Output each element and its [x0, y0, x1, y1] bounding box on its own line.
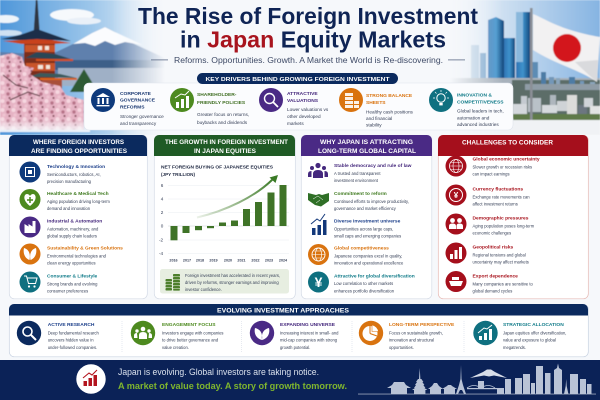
item: stable democracy: A trusted and transparent — [334, 171, 381, 176]
bar chart: 2 — [161, 210, 164, 215]
approach: engagement focus: ENGAGEMENT FOCUS — [162, 322, 216, 328]
driver: innovation: INNOVATION & — [457, 92, 492, 98]
driver: corporate governance: GOVERNANCE — [120, 98, 156, 104]
heading: why Japan: LONG-TERM GLOBAL CAPITAL — [318, 149, 416, 155]
item: global uncertainty — [446, 156, 540, 177]
item: currency: affect investment returns — [472, 202, 518, 207]
panel: growth in foreign investment — [154, 135, 295, 299]
item: global uncertainty: can impact earnings — [472, 172, 510, 177]
bar chart: 2018 — [196, 258, 204, 262]
heading: growth — [154, 135, 295, 156]
item: commitment to reform: Continued efforts to improve productivity, — [334, 199, 409, 204]
driver: corporate governance — [91, 88, 164, 126]
driver: strong balance sheets: STRONG BALANCE — [366, 93, 413, 99]
callout: chart note: investor confidence. — [185, 287, 222, 292]
heading: opportunities: ARE FINDING OPPORTUNITIES — [31, 149, 127, 155]
item: global competitiveness: innovation and operational excellence — [334, 261, 404, 266]
heading: key drivers: KEY DRIVERS BEHIND GROWING FOREIGN INVESTMENT — [206, 77, 390, 83]
item: consumer: Consumer & Lifestyle — [47, 274, 98, 280]
item: sustainability: Sustainability & Green Solutions — [47, 246, 123, 252]
item: diverse universe: Diverse investment universe — [334, 218, 401, 224]
driver: corporate governance: Stronger governance — [120, 114, 164, 119]
bar chart: 2024 — [279, 258, 288, 262]
callout: chart note: Foreign investment has accelerated in recent years, — [185, 273, 280, 278]
item: demographics — [446, 214, 535, 236]
item: export dependence — [446, 271, 533, 294]
driver: corporate governance: CORPORATE — [120, 91, 152, 97]
approach: strategic allocation — [473, 321, 566, 350]
photo: pagoda, Mount Fuji and cherry blossoms — [0, 0, 165, 135]
approach: expanding universe: mid-cap companies with strong — [280, 338, 338, 343]
item: demographics: economic challenges — [472, 231, 511, 236]
heading: approaches — [9, 304, 588, 316]
bar chart: 2022 — [251, 258, 260, 262]
item: geopolitical: Geopolitical risks — [472, 245, 514, 251]
item: industrial: global supply chain leaders — [47, 234, 97, 238]
bar chart: 2023 — [265, 258, 273, 262]
item: export dependence: global demand cycles — [472, 289, 512, 294]
photo: Tokyo skyscrapers and Japanese flag — [455, 0, 600, 121]
icon: rising chart badge — [76, 364, 106, 394]
item: global competitiveness: Global competitiveness — [334, 246, 389, 252]
item: healthcare: Aging population driving long-term — [47, 199, 110, 204]
heading: why Japan: WHY JAPAN IS ATTRACTING — [320, 140, 413, 146]
footer message: Japan is evolving. Global investors are taking notice. — [118, 367, 319, 377]
heading: growth: IN JAPAN EQUITIES — [194, 149, 256, 155]
driver: shareholder policies: Greater focus on returns, — [197, 112, 249, 117]
arrow: growth trend — [197, 175, 278, 218]
item: demographics: Demographic pressures — [472, 216, 529, 222]
item: healthcare — [20, 189, 110, 211]
icon: coin stacks — [166, 274, 180, 291]
driver: strong balance sheets — [339, 88, 414, 128]
approach: long-term perspective: innovation and structural — [389, 338, 434, 343]
heading: opportunities: WHERE FOREIGN INVESTORS — [33, 140, 124, 146]
approach: expanding universe: growth potential. — [280, 345, 310, 350]
chart title: NET FOREIGN BUYING OF JAPANESE EQUITIES — [161, 164, 274, 170]
chart title: (JPY TRILLION) — [161, 172, 195, 178]
driver: corporate governance: REFORMS — [120, 104, 145, 110]
driver: attractive valuations — [259, 88, 329, 126]
title — [138, 3, 478, 52]
approach: active research: Deep fundamental research — [48, 330, 99, 336]
approach: long-term perspective: Focus on sustainable growth, — [389, 330, 443, 336]
bar chart: 2019 — [209, 258, 218, 262]
item: global diversification: Low correlation to other markets — [334, 281, 393, 286]
heading: challenges: CHALLENGES TO CONSIDER — [462, 140, 554, 146]
title: in Japan Equity Markets — [180, 26, 446, 52]
item: currency: Exchange rate movements can — [472, 195, 530, 200]
driver: corporate governance: and transparency — [120, 121, 157, 126]
approach: long-term perspective: LONG-TERM PERSPECTIVE — [389, 322, 455, 328]
driver: strong balance sheets: SHEETS — [366, 100, 386, 106]
item: industrial: Automation, machinery, and — [47, 226, 99, 232]
approach: strategic allocation: Japan equities offer diversification, — [503, 330, 566, 336]
driver: innovation: Global leaders in tech, — [457, 108, 504, 114]
driver: innovation: advanced industries — [457, 122, 499, 127]
item: global competitiveness: Japanese companies excel in quality, — [334, 254, 402, 259]
driver: shareholder policies: SHAREHOLDER- — [197, 92, 237, 98]
chart title — [161, 164, 274, 178]
item: diverse universe: small caps and emerging companies — [334, 234, 401, 238]
item: industrial — [20, 216, 102, 238]
approach: engagement focus: Investors engage with companies — [162, 330, 223, 336]
item: global uncertainty: Slower growth or recession risks — [472, 165, 532, 170]
driver: strong balance sheets: and financial — [366, 116, 392, 121]
item: geopolitical — [446, 242, 529, 265]
driver: attractive valuations: ATTRACTIVE — [287, 91, 318, 97]
approach: strategic allocation: value and exposure to global — [503, 338, 556, 343]
footer message: A market of value today. A story of growth tomorrow. — [118, 381, 347, 391]
approach: engagement focus — [131, 321, 223, 350]
title: The Rise of Foreign Investment — [138, 3, 478, 29]
heading: approaches: EVOLVING INVESTMENT APPROACHES — [217, 308, 349, 314]
item: global competitiveness — [308, 244, 404, 266]
heading: challenges — [438, 135, 588, 156]
item: export dependence: Many companies are sensitive to — [472, 282, 533, 287]
bar chart: 2021 — [237, 258, 246, 262]
item: currency: Currency fluctuations — [472, 187, 523, 193]
heading: growth: THE GROWTH IN FOREIGN INVESTMENT — [165, 140, 288, 146]
item: stable democracy — [308, 163, 412, 183]
item: sustainability — [20, 244, 123, 266]
approach: active research — [17, 321, 99, 350]
footer banner — [0, 360, 600, 400]
item: global diversification: enhances portfolio diversification — [334, 289, 395, 294]
driver: innovation — [429, 88, 504, 127]
approach: strategic allocation: megatrends. — [503, 345, 526, 350]
item: global uncertainty: Global economic uncertainty — [472, 157, 540, 163]
driver: shareholder policies: buybacks and dividends — [197, 120, 248, 125]
item: currency: ¥ — [454, 191, 459, 200]
item: demographics: Aging population poses long-term — [472, 224, 535, 229]
heading: why Japan — [301, 135, 432, 156]
bar chart: -2 — [159, 238, 163, 242]
approach: engagement focus: value creation. — [162, 345, 189, 350]
driver: attractive valuations: markets — [287, 121, 304, 126]
item: healthcare: demand and innovation — [47, 206, 91, 211]
approach: long-term perspective — [359, 321, 455, 350]
item: consumer: Strong brands and evolving — [47, 282, 98, 286]
driver: strong balance sheets: Healthy cash positions — [366, 110, 414, 114]
panel: evolving investment approaches — [9, 304, 588, 357]
item: industrial: Industrial & Automation — [47, 218, 102, 224]
driver: shareholder policies — [170, 88, 249, 125]
approach: strategic allocation: STRATEGIC ALLOCATION — [503, 322, 564, 328]
callout: chart note — [160, 269, 289, 294]
item: technology: Technology & Innovation — [47, 164, 105, 170]
driver: strong balance sheets: stability — [366, 122, 382, 128]
item: technology: Semiconductors, robotics, AI, — [47, 172, 101, 177]
heading: opportunities — [9, 135, 147, 156]
approach: expanding universe: EXPANDING UNIVERSE — [280, 322, 336, 328]
approach: expanding universe: Increasing interest in small- and — [280, 330, 339, 336]
item: stable democracy: investment environment — [334, 178, 379, 183]
approach: engagement focus: to drive better governance and — [162, 338, 219, 343]
panel: key drivers — [84, 73, 513, 130]
item: currency — [446, 184, 530, 207]
approach: expanding universe — [250, 321, 339, 350]
item: commitment to reform: Commitment to reform — [334, 191, 387, 197]
item: commitment to reform: governance and market efficiency — [334, 206, 397, 211]
callout: chart note: driven by reforms, stronger earnings and improving — [185, 280, 279, 285]
panel: where foreign investors are finding opportunities — [9, 135, 147, 299]
illustration: Japan skyline — [358, 364, 596, 394]
bar chart: 2016 — [169, 258, 178, 262]
heading: key drivers — [197, 73, 398, 84]
bar chart: -4 — [159, 251, 163, 256]
panel: challenges to consider — [438, 135, 588, 299]
item: global diversification: Attractive for global diversification — [334, 274, 415, 280]
item: global diversification: ¥ — [315, 274, 323, 290]
driver: attractive valuations: Lower valuations vs — [287, 107, 329, 112]
approach: active research: ACTIVE RESEARCH — [48, 322, 95, 328]
subtitle: Reforms. Opportunities. Growth. A Market the World is Re-discovering. — [174, 56, 443, 65]
bar chart: 6 — [161, 183, 164, 188]
panel: why Japan is attracting capital — [301, 135, 432, 299]
approach: long-term perspective: opportunities. — [389, 345, 414, 350]
item: technology: precision manufacturing — [47, 179, 92, 184]
bar chart — [159, 183, 289, 262]
item: diverse universe: Opportunities across large caps, — [334, 226, 393, 232]
driver: attractive valuations: VALUATIONS — [287, 98, 319, 104]
item: technology — [20, 162, 105, 184]
item: geopolitical: Regional tensions and global — [472, 253, 526, 258]
driver: shareholder policies: FRIENDLY POLICIES — [197, 100, 246, 106]
driver: innovation: COMPETITIVENESS — [457, 100, 504, 106]
item: geopolitical: uncertainty may affect markets — [472, 260, 529, 265]
item: sustainability: clean energy opportunities — [47, 260, 96, 266]
driver: attractive valuations: other developed — [287, 114, 321, 119]
item: healthcare: Healthcare & Medical Tech — [47, 191, 109, 197]
approach: active research: uncovers hidden value in — [48, 338, 94, 343]
item: commitment to reform — [308, 191, 409, 211]
driver: innovation: automation and — [457, 116, 490, 120]
item: diverse universe — [311, 214, 401, 238]
bar chart: 4 — [161, 196, 164, 202]
item: consumer — [20, 272, 98, 294]
bar chart: 2017 — [183, 258, 191, 262]
bar chart: 2020 — [224, 258, 232, 262]
item: sustainability: Environmental technologies and — [47, 254, 107, 258]
item: stable democracy: Stable democracy and rule of law — [334, 163, 412, 169]
item: global diversification — [308, 272, 415, 294]
approach: active research: under-followed companies. — [48, 345, 97, 350]
footer message — [118, 367, 347, 391]
item: consumer: consumer preferences — [47, 288, 88, 294]
bar chart: 0 — [161, 224, 164, 228]
item: export dependence: Export dependence — [472, 274, 518, 280]
